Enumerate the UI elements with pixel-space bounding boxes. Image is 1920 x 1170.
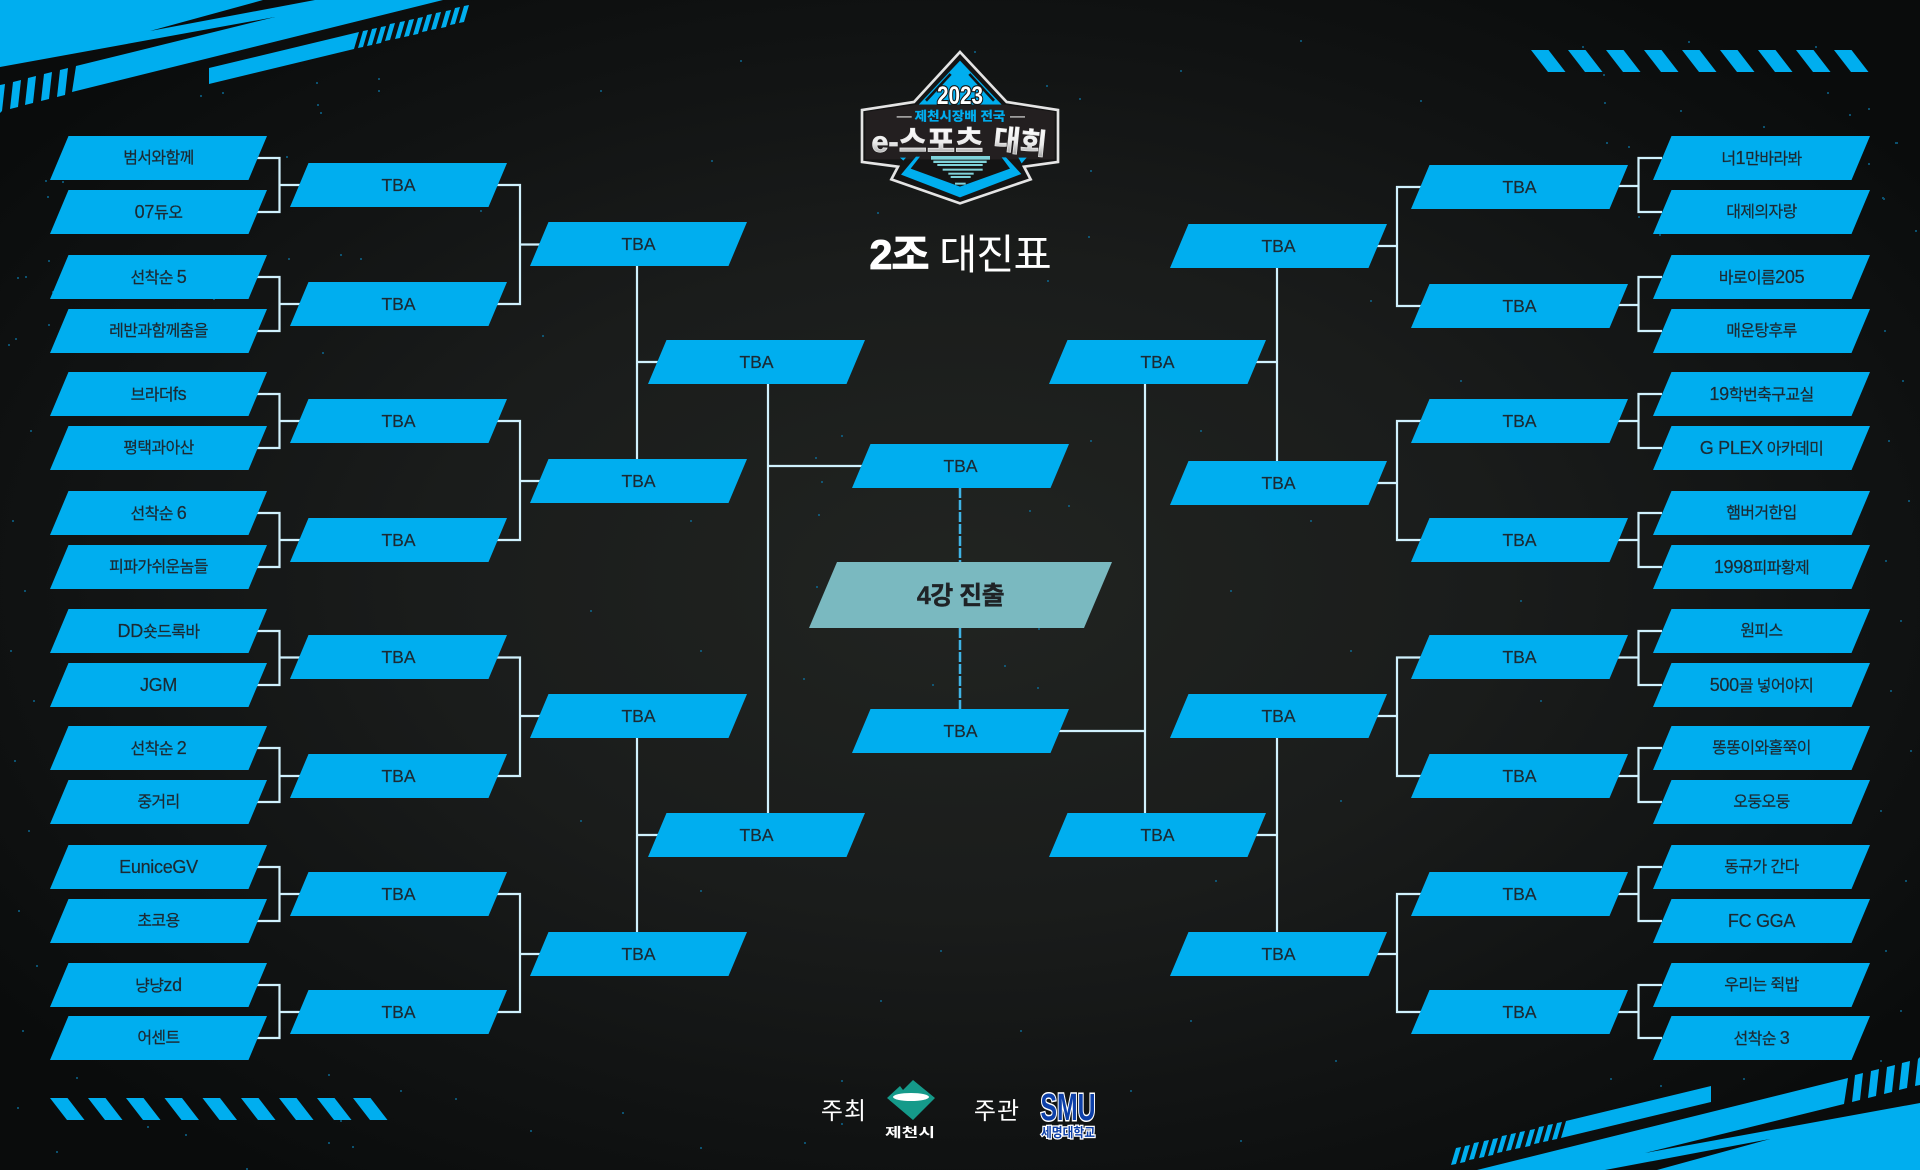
slot: TBA (290, 990, 507, 1034)
team: 동규가 간다: 동규가 간다 (1724, 859, 1799, 876)
team: 바로이름205 (1653, 255, 1870, 299)
team: G PLEX 아카데미: G PLEX 아카데미 (1700, 438, 1823, 458)
hazard stripes: bottom-left (50, 1098, 388, 1120)
team: 선착순 6: 선착순 6 (131, 503, 186, 523)
semifinal slot: bottom TBA: TBA (943, 721, 978, 741)
logo: 2023 제천시장배 전국 e-스포츠 대회: 제천시장배 전국 (915, 110, 1006, 124)
team: 오둥오둥 (1653, 780, 1870, 824)
team: 선착순 2: 선착순 2 (131, 738, 186, 758)
team: 레반과함께춤을: 레반과함께춤을 (109, 323, 208, 340)
slot: TBA: TBA (381, 647, 416, 667)
slot: TBA (1049, 340, 1266, 384)
slot: TBA (1411, 635, 1628, 679)
team: 중거리: 중거리 (137, 794, 180, 811)
title: 2조 (869, 231, 929, 278)
team: 07듀오: 07듀오 (135, 202, 182, 222)
team: 선착순 3: 선착순 3 (1734, 1028, 1789, 1048)
team: 평택과아산 (50, 426, 267, 470)
team: 동규가 간다 (1653, 845, 1870, 889)
team: 500골 넣어야지: 500골 넣어야지 (1710, 675, 1813, 695)
team: 햄버거한입 (1653, 491, 1870, 535)
team: 매운탕후루 (1653, 309, 1870, 353)
team: 범서와함께 (50, 136, 267, 180)
slot: TBA (1411, 518, 1628, 562)
slot: TBA (290, 518, 507, 562)
center column (809, 444, 1112, 753)
team: G PLEX 아카데미 (1653, 426, 1870, 470)
slot: TBA (1411, 872, 1628, 916)
left round 3 slots (530, 222, 747, 976)
team: JGM (50, 663, 267, 707)
team: 매운탕후루: 매운탕후루 (1726, 323, 1797, 340)
team: DD숏드록바: DD숏드록바 (118, 621, 199, 641)
team: 어센트: 어센트 (137, 1030, 180, 1047)
slot: TBA: TBA (621, 706, 656, 726)
team: 초코용 (50, 899, 267, 943)
organizer label: 주관: 주관 (974, 1098, 1020, 1124)
slot: TBA: TBA (1261, 944, 1296, 964)
team: 너1만바라봐: 너1만바라봐 (1721, 148, 1802, 168)
slot: TBA (1170, 224, 1387, 268)
team: 중거리 (50, 780, 267, 824)
slot: TBA: TBA (1502, 296, 1537, 316)
slot: TBA (290, 282, 507, 326)
slot: TBA: TBA (381, 530, 416, 550)
title: 대진표 (939, 231, 1051, 278)
semifinal slot: top TBA: TBA (943, 456, 978, 476)
slot: TBA (1170, 694, 1387, 738)
title (869, 231, 1051, 278)
logo: 2023 제천시장배 전국 e-스포츠 대회: e-스포츠 (871, 126, 983, 159)
slot: TBA: TBA (1502, 766, 1537, 786)
slot: TBA: TBA (1502, 411, 1537, 431)
slot: TBA: TBA (381, 766, 416, 786)
left round 4 slots (648, 340, 865, 857)
team: 피파가쉬운놈들 (50, 545, 267, 589)
team: 똥똥이와홀쭉이 (1653, 726, 1870, 770)
team: 500골 넣어야지 (1653, 663, 1870, 707)
team: 범서와함께: 범서와함께 (123, 150, 194, 167)
slot: TBA: TBA (621, 471, 656, 491)
slot: TBA: TBA (1502, 647, 1537, 667)
team: 대제의자랑: 대제의자랑 (1726, 204, 1797, 221)
semifinal slot: top TBA (852, 444, 1069, 488)
slot: TBA: TBA (621, 234, 656, 254)
slot: TBA: TBA (1502, 530, 1537, 550)
team: 우리는 쥑밥: 우리는 쥑밥 (1724, 977, 1799, 994)
team: 19학번축구교실: 19학번축구교실 (1709, 384, 1814, 404)
team: EuniceGV (50, 845, 267, 889)
slot: TBA (648, 340, 865, 384)
callout: 4강 진출: 4강 진출 (917, 582, 1004, 610)
team: 선착순 6 (50, 491, 267, 535)
team: 오둥오둥: 오둥오둥 (1733, 794, 1790, 811)
team: 바로이름205: 바로이름205 (1719, 267, 1804, 287)
slot: TBA: TBA (381, 411, 416, 431)
right round 4 slots (1049, 340, 1266, 857)
icon: SMU 세명대학교 logo: 세명대학교 (1041, 1125, 1095, 1140)
right round 3 slots (1170, 224, 1387, 976)
team: 1998피파황제 (1653, 545, 1870, 589)
team: FC GGA: FC GGA (1728, 911, 1795, 931)
team: 우리는 쥑밥 (1653, 963, 1870, 1007)
slot: TBA: TBA (1140, 825, 1175, 845)
team: 너1만바라봐 (1653, 136, 1870, 180)
team: FC GGA (1653, 899, 1870, 943)
team: 선착순 5: 선착순 5 (131, 267, 186, 287)
slot: TBA: TBA (381, 884, 416, 904)
slot: TBA: TBA (739, 825, 774, 845)
slot: TBA (1411, 754, 1628, 798)
team: 대제의자랑 (1653, 190, 1870, 234)
slot: TBA: TBA (381, 294, 416, 314)
slot: TBA (1411, 284, 1628, 328)
team: 선착순 5 (50, 255, 267, 299)
icon: 제천시 logo (885, 1080, 935, 1140)
logo: 2023 제천시장배 전국 e-스포츠 대회: 2023 (937, 83, 983, 110)
slot: TBA (530, 694, 747, 738)
slot: TBA (648, 813, 865, 857)
team: 선착순 2 (50, 726, 267, 770)
logo: 2023 제천시장배 전국 e-스포츠 대회 (860, 50, 1060, 205)
slot: TBA (1411, 399, 1628, 443)
slot: TBA (290, 754, 507, 798)
slot: TBA (530, 932, 747, 976)
hazard stripes: top-right (1531, 50, 1868, 72)
slot: TBA (530, 459, 747, 503)
slot: TBA (1170, 461, 1387, 505)
team: 평택과아산: 평택과아산 (123, 440, 194, 457)
slot: TBA (290, 872, 507, 916)
slot: TBA: TBA (1261, 236, 1296, 256)
team: 1998피파황제: 1998피파황제 (1714, 557, 1809, 577)
team: 선착순 3 (1653, 1016, 1870, 1060)
icon: 제천시 logo: 제천시 (885, 1125, 935, 1140)
slot: TBA: TBA (1140, 352, 1175, 372)
team: 냥냥zd (50, 963, 267, 1007)
slot: TBA (290, 399, 507, 443)
team: 원피스: 원피스 (1740, 623, 1783, 640)
slot: TBA: TBA (739, 352, 774, 372)
slot: TBA (530, 222, 747, 266)
team: 어센트 (50, 1016, 267, 1060)
slot: TBA: TBA (1502, 1002, 1537, 1022)
team: 레반과함께춤을 (50, 309, 267, 353)
slot: TBA: TBA (1261, 706, 1296, 726)
team: JGM: JGM (140, 675, 177, 695)
slot: TBA: TBA (1502, 177, 1537, 197)
slot: TBA (1049, 813, 1266, 857)
slot: TBA: TBA (621, 944, 656, 964)
semifinal slot: bottom TBA (852, 709, 1069, 753)
right round of 32 teams (1653, 136, 1870, 1060)
logo: 2023 제천시장배 전국 e-스포츠 대회: 대회 (992, 123, 1048, 162)
team: 피파가쉬운놈들: 피파가쉬운놈들 (109, 559, 208, 576)
team: 07듀오 (50, 190, 267, 234)
slot: TBA (1411, 990, 1628, 1034)
host label: 주최: 주최 (821, 1098, 867, 1124)
team: 브라더fs: 브라더fs (131, 384, 186, 404)
right round 2 slots (1411, 165, 1628, 1034)
team: DD숏드록바 (50, 609, 267, 653)
team: 똥똥이와홀쭉이: 똥똥이와홀쭉이 (1712, 740, 1811, 757)
team: 원피스 (1653, 609, 1870, 653)
slot: TBA (1411, 165, 1628, 209)
slot: TBA (290, 635, 507, 679)
team: 브라더fs (50, 372, 267, 416)
slot: TBA (290, 163, 507, 207)
team: EuniceGV: EuniceGV (119, 857, 198, 877)
left round of 32 teams (50, 136, 267, 1060)
left round 2 slots (290, 163, 507, 1034)
team: 19학번축구교실 (1653, 372, 1870, 416)
callout: 4강 진출 (809, 562, 1112, 628)
team: 초코용: 초코용 (137, 913, 180, 930)
slot: TBA: TBA (1261, 473, 1296, 493)
slot: TBA: TBA (381, 175, 416, 195)
slot: TBA: TBA (381, 1002, 416, 1022)
slot: TBA: TBA (1502, 884, 1537, 904)
slot: TBA (1170, 932, 1387, 976)
team: 햄버거한입: 햄버거한입 (1726, 505, 1797, 522)
team: 냥냥zd: 냥냥zd (135, 975, 182, 995)
